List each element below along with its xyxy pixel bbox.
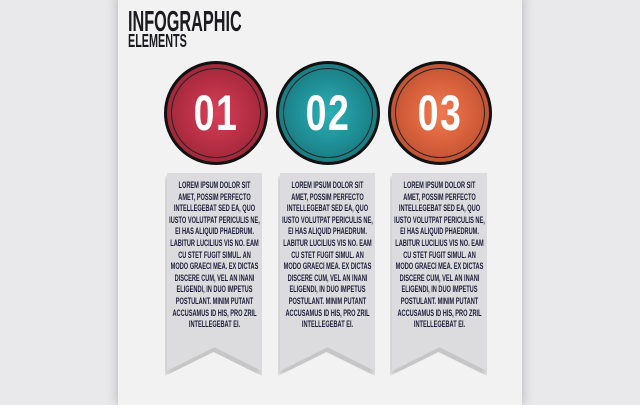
ribbon 2: MODO GRAECI MEA. EX DICTAS [284,260,371,271]
ribbon 1 [167,173,262,371]
ribbon 1: INTELLEGEBAT SED EA, QUO [174,202,255,213]
ribbon 3: INTELLEGEBAT SED EA, QUO [399,202,480,213]
ribbon 3: INTELLEGEBAT EI. [414,318,465,329]
circle: 02 [276,61,380,165]
ribbon 3: CU STET FUGIT SIMUL. AN [403,249,476,260]
ribbon 1: ELIGENDI, IN DUO IMPETUS [177,283,252,294]
ribbon 2: LOREM IPSUM DOLOR SIT [292,179,363,190]
ribbon 2: ELIGENDI, IN DUO IMPETUS [290,283,365,294]
ribbon 1: LOREM IPSUM DOLOR SIT [179,179,250,190]
ribbon 1: AMET, POSSIM PERFECTO [178,191,251,202]
ribbon 2: DISCERE CUM, VEL AN INANI [288,272,367,283]
ribbon 2: AMET, POSSIM PERFECTO [291,191,364,202]
ribbon 3: IUSTO VOLUTPAT PERICULIS NE, [394,214,485,225]
title: INFOGRAPHIC [128,6,242,38]
ribbon 3: AMET, POSSIM PERFECTO [403,191,476,202]
circle: 03 [388,61,492,165]
ribbon 1: IUSTO VOLUTPAT PERICULIS NE, [169,214,260,225]
ribbon 1: LABITUR LUCILIUS VIS NO. EAM [170,237,259,248]
ribbon 2: CU STET FUGIT SIMUL. AN [291,249,364,260]
ribbon 3 [392,173,487,371]
ribbon 2 [280,173,375,371]
circle: 01: 01 [194,85,238,141]
ribbon 1: EI HAS ALIQUID PHAEDRUM. [175,225,254,236]
ribbon 1: MODO GRAECI MEA. EX DICTAS [171,260,258,271]
circle: 02: 02 [306,85,350,141]
ribbon 2: ACCUSAMUS ID HIS, PRO ZRIL [285,307,370,318]
ribbon 1: DISCERE CUM, VEL AN INANI [175,272,254,283]
ribbon 2: LABITUR LUCILIUS VIS NO. EAM [283,237,372,248]
ribbon 2: EI HAS ALIQUID PHAEDRUM. [288,225,367,236]
ribbon 1: ACCUSAMUS ID HIS, PRO ZRIL [172,307,257,318]
circle: 01 [164,61,268,165]
ribbon 2: INTELLEGEBAT EI. [302,318,353,329]
ribbon 3: DISCERE CUM, VEL AN INANI [400,272,479,283]
ribbon 3: ELIGENDI, IN DUO IMPETUS [402,283,477,294]
ribbon 3: EI HAS ALIQUID PHAEDRUM. [400,225,479,236]
ribbon 1: INTELLEGEBAT EI. [189,318,240,329]
ribbon 3: LABITUR LUCILIUS VIS NO. EAM [395,237,484,248]
ribbon 2: POSTULANT. MINIM PUTANT [289,295,366,306]
ribbon 3: POSTULANT. MINIM PUTANT [401,295,478,306]
ribbon 1: CU STET FUGIT SIMUL. AN [178,249,251,260]
ribbon 1: POSTULANT. MINIM PUTANT [176,295,253,306]
ribbon 2: INTELLEGEBAT SED EA, QUO [287,202,368,213]
ribbon 3: MODO GRAECI MEA. EX DICTAS [396,260,483,271]
ribbon 3: LOREM IPSUM DOLOR SIT [404,179,475,190]
ribbon 3: ACCUSAMUS ID HIS, PRO ZRIL [397,307,482,318]
ribbon 2: IUSTO VOLUTPAT PERICULIS NE, [282,214,373,225]
circle: 03: 03 [418,85,462,141]
subtitle: ELEMENTS [128,31,187,51]
